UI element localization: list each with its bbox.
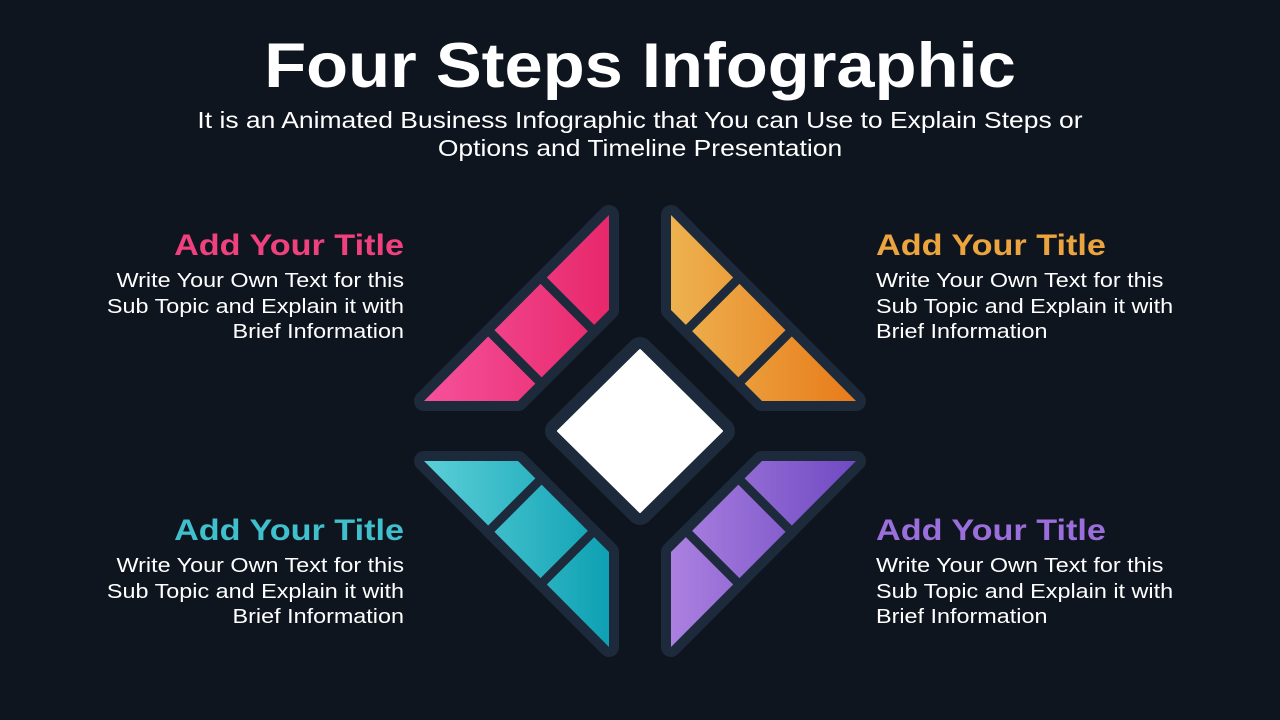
title: Four Steps Infographic [264, 31, 1016, 101]
text block: bottom-left: Write Your Own Text for this [117, 554, 404, 577]
segment: purple [671, 461, 856, 647]
subtitle: Options and Timeline Presentation [438, 135, 842, 161]
text block: top-right: Write Your Own Text for this [876, 269, 1163, 292]
text block: top-left [107, 229, 404, 343]
segment: pink [424, 215, 609, 401]
text block: top-left: Brief Information [233, 320, 404, 343]
subtitle [197, 107, 1083, 161]
text block: bottom-right: Add Your Title [876, 514, 1106, 547]
text block: top-right: Add Your Title [876, 229, 1106, 262]
subtitle: It is an Animated Business Infographic that You can Use to Explain Steps or [197, 107, 1083, 133]
text block: top-right [876, 229, 1173, 343]
text block: bottom-right: Write Your Own Text for this [876, 554, 1163, 577]
text block: bottom-right [876, 514, 1173, 628]
segment: teal [424, 461, 609, 647]
text block: bottom-left: Add Your Title [174, 514, 404, 547]
center diamond [558, 350, 722, 512]
text block: bottom-right: Brief Information [876, 605, 1047, 628]
text block: bottom-right: Sub Topic and Explain it with [876, 580, 1173, 602]
text block: bottom-left [107, 514, 404, 628]
text block: top-left: Write Your Own Text for this [117, 269, 404, 292]
text block: bottom-left: Brief Information [233, 605, 404, 628]
text block: top-right: Sub Topic and Explain it with [876, 294, 1173, 318]
text block: bottom-left: Sub Topic and Explain it with [107, 580, 404, 602]
text block: top-left: Sub Topic and Explain it with [107, 294, 404, 318]
segment: orange [671, 215, 856, 401]
text block: top-right: Brief Information [876, 320, 1047, 343]
text block: top-left: Add Your Title [174, 229, 404, 262]
